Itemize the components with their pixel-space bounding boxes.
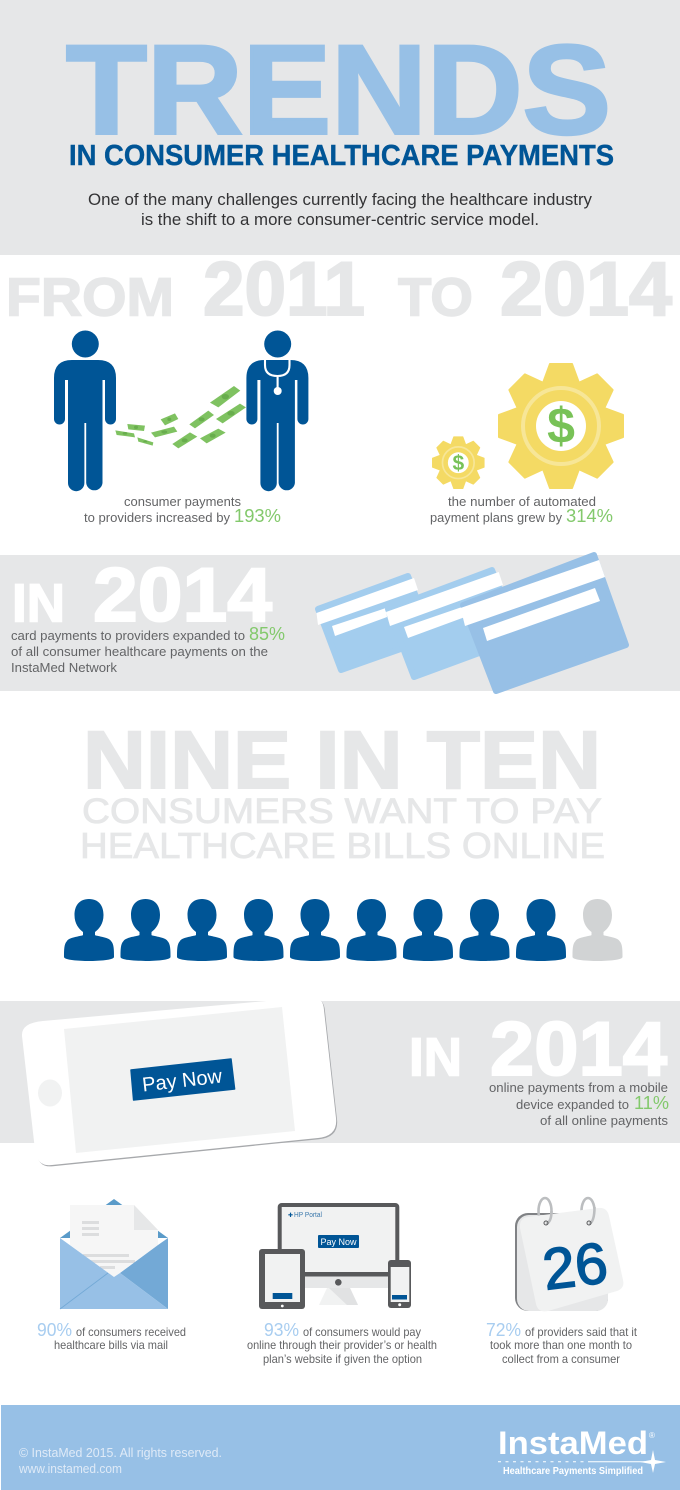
- heading: nine in ten: [80, 715, 605, 866]
- caption: automated payment plans: 314%: [566, 506, 613, 526]
- button: pay now: [131, 1059, 235, 1100]
- copyright text: © InstaMed 2015. All rights reserved.: [19, 1446, 222, 1460]
- text: mobile payments: 11%: [634, 1093, 669, 1113]
- monitor: Pay Now: [320, 1237, 357, 1247]
- icon: consumer figure: [54, 330, 116, 491]
- logo: InstaMed: [498, 1425, 666, 1477]
- monitor: ✚: [288, 1212, 293, 1219]
- icon: flying money: [115, 386, 246, 448]
- caption: consumer payments: to providers increased by: [84, 511, 231, 525]
- tablet: [259, 1249, 305, 1309]
- heading: nine in ten: NINE IN TEN: [83, 715, 601, 806]
- text: mobile payments: [489, 1081, 669, 1128]
- heading: in 2014: IN: [12, 573, 65, 633]
- heading: in 2014: [12, 553, 272, 638]
- title: TRENDS: [66, 18, 611, 160]
- monitor: HP Portal: [294, 1212, 322, 1219]
- monitor: [278, 1205, 399, 1305]
- heading: in 2014: 2014: [490, 1007, 667, 1092]
- caption: consumer payments: 193%: [234, 506, 281, 526]
- caption: 90 percent: healthcare bills via mail: [54, 1339, 168, 1352]
- caption: automated payment plans: the number of automated: [448, 495, 596, 509]
- icon: envelope with bill: [60, 1199, 168, 1309]
- copyright text: www.instamed.com: [18, 1462, 122, 1476]
- icon: small gear: [432, 437, 484, 489]
- caption: consumer payments: [84, 495, 281, 526]
- panel: header: [0, 0, 680, 255]
- text: mobile payments: device expanded to: [516, 1098, 629, 1112]
- caption: 90 percent: 90%: [37, 1320, 72, 1340]
- icon: smartphone: [22, 997, 337, 1166]
- panel: card payments band: [0, 553, 680, 691]
- heading: nine in ten: CONSUMERS WANT TO PAY: [82, 791, 602, 831]
- intro text: is the shift to a more consumer-centric service model.: [141, 211, 539, 229]
- heading: from 2011 to 2014: 2014: [500, 247, 672, 332]
- icon: large gear: [499, 364, 623, 488]
- icon row: nine of ten people: [64, 899, 622, 961]
- heading: from 2011 to 2014: 2011: [203, 247, 365, 332]
- copyright text: [18, 1446, 222, 1476]
- calendar date: 26: [539, 1230, 611, 1303]
- text: card payments: [11, 624, 285, 675]
- icon: credit card front: [460, 555, 626, 691]
- caption: 90 percent: [37, 1320, 186, 1352]
- caption: 72 percent: 72%: [486, 1320, 521, 1340]
- phone: [388, 1260, 411, 1308]
- icon: doctor figure with stethoscope: [246, 330, 308, 491]
- caption: 93 percent: [247, 1320, 437, 1366]
- icon: credit card middle: [386, 570, 520, 677]
- caption: 90 percent: of consumers received: [76, 1326, 186, 1339]
- heading: in 2014: [409, 1007, 667, 1092]
- text: card payments: card payments to providers expanded to: [11, 629, 245, 643]
- panel: mobile payments band: [0, 997, 680, 1166]
- text: card payments: 85%: [249, 624, 285, 644]
- icon: large gear: $: [547, 398, 575, 454]
- icon: calendar: [515, 1198, 623, 1311]
- heading: in 2014: IN: [409, 1027, 462, 1087]
- text: mobile payments: of all online payments: [540, 1114, 668, 1128]
- text: mobile payments: online payments from a mobile: [489, 1081, 668, 1095]
- caption: 93 percent: online through their provider’s or health: [247, 1339, 437, 1352]
- heading: nine in ten: HEALTHCARE BILLS ONLINE: [80, 825, 605, 866]
- heading: from 2011 to 2014: [6, 247, 672, 332]
- text: card payments: InstaMed Network: [11, 661, 118, 675]
- button: pay now: Pay Now: [141, 1065, 224, 1096]
- text: card payments: of all consumer healthcare payments on the: [11, 645, 268, 659]
- heading: from 2011 to 2014: FROM: [6, 267, 174, 327]
- caption: 93 percent: of consumers would pay: [303, 1326, 421, 1339]
- caption: automated payment plans: payment plans grew by: [430, 511, 563, 525]
- caption: consumer payments: consumer payments: [124, 495, 241, 509]
- intro text: One of the many challenges currently facing the healthcare industry: [88, 191, 593, 209]
- logo: InstaMed: Healthcare Payments Simplified: [503, 1466, 643, 1477]
- caption: 72 percent: collect from a consumer: [502, 1353, 620, 1366]
- panel: footer: [1, 1405, 680, 1490]
- caption: 72 percent: [486, 1320, 638, 1366]
- caption: 72 percent: of providers said that it: [525, 1326, 638, 1339]
- heading: in 2014: 2014: [93, 553, 272, 638]
- heading: from 2011 to 2014: TO: [398, 267, 473, 327]
- icon: small gear: $: [452, 452, 464, 475]
- logo: InstaMed: ®: [649, 1431, 655, 1440]
- caption: 72 percent: took more than one month to: [490, 1339, 632, 1352]
- intro text: [88, 191, 593, 229]
- icon: monitor, tablet and phone: [259, 1205, 411, 1309]
- subtitle: IN CONSUMER HEALTHCARE PAYMENTS: [69, 140, 614, 172]
- caption: 93 percent: 93%: [264, 1320, 299, 1340]
- caption: automated payment plans: [430, 495, 613, 526]
- logo: InstaMed: InstaMed: [498, 1425, 648, 1461]
- icon: credit card back: [316, 576, 432, 670]
- caption: 93 percent: plan’s website if given the option: [263, 1353, 422, 1366]
